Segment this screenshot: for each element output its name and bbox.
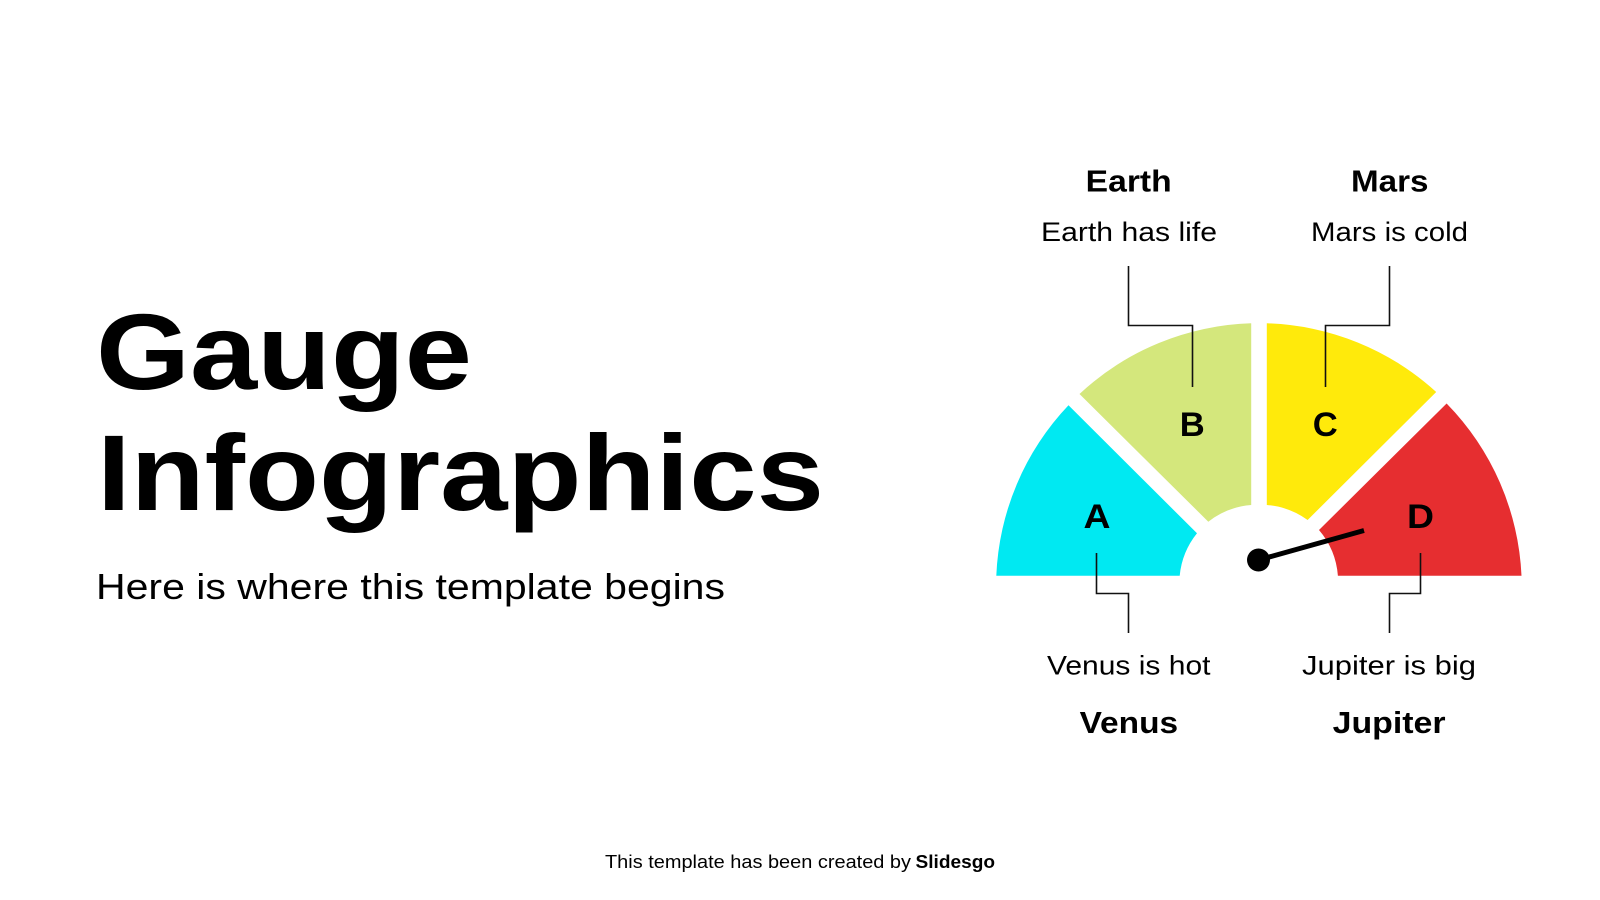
footer credit: This template has been created by	[605, 852, 911, 872]
title	[96, 291, 824, 533]
title: Gauge	[96, 291, 472, 412]
gauge chart	[996, 323, 1522, 576]
letter A: A	[1084, 498, 1110, 536]
segment B: lime	[1080, 323, 1251, 522]
title: Infographics	[97, 412, 824, 533]
connector: Mars to C	[1326, 266, 1390, 387]
segment C: yellow	[1267, 323, 1436, 520]
letter D: D	[1407, 498, 1434, 536]
footer credit: Slidesgo	[916, 852, 995, 872]
connector: Jupiter to D	[1390, 553, 1420, 633]
segment A: cyan	[996, 405, 1197, 576]
label: Mars: Mars	[1351, 164, 1428, 198]
label: Earth: Earth has life	[1041, 217, 1217, 247]
letter B: B	[1180, 406, 1205, 444]
label: Jupiter: Jupiter is big	[1302, 650, 1476, 680]
connector: Earth to B	[1128, 266, 1192, 387]
needle	[1247, 530, 1364, 572]
connector: Venus to A	[1096, 553, 1128, 633]
label: Venus: Venus	[1080, 705, 1178, 740]
label: Jupiter: Jupiter	[1333, 705, 1446, 740]
label: Mars: Mars is cold	[1311, 217, 1468, 247]
label: Earth: Earth	[1086, 164, 1172, 198]
label: Venus: Venus is hot	[1047, 650, 1211, 680]
label: Mars	[1311, 164, 1468, 247]
letter C: C	[1313, 406, 1338, 444]
segment D: red	[1319, 404, 1522, 576]
label: Jupiter	[1302, 650, 1476, 740]
subtitle: Here is where this template begins	[96, 566, 725, 607]
label: Earth	[1041, 164, 1217, 247]
label: Venus	[1047, 650, 1211, 740]
